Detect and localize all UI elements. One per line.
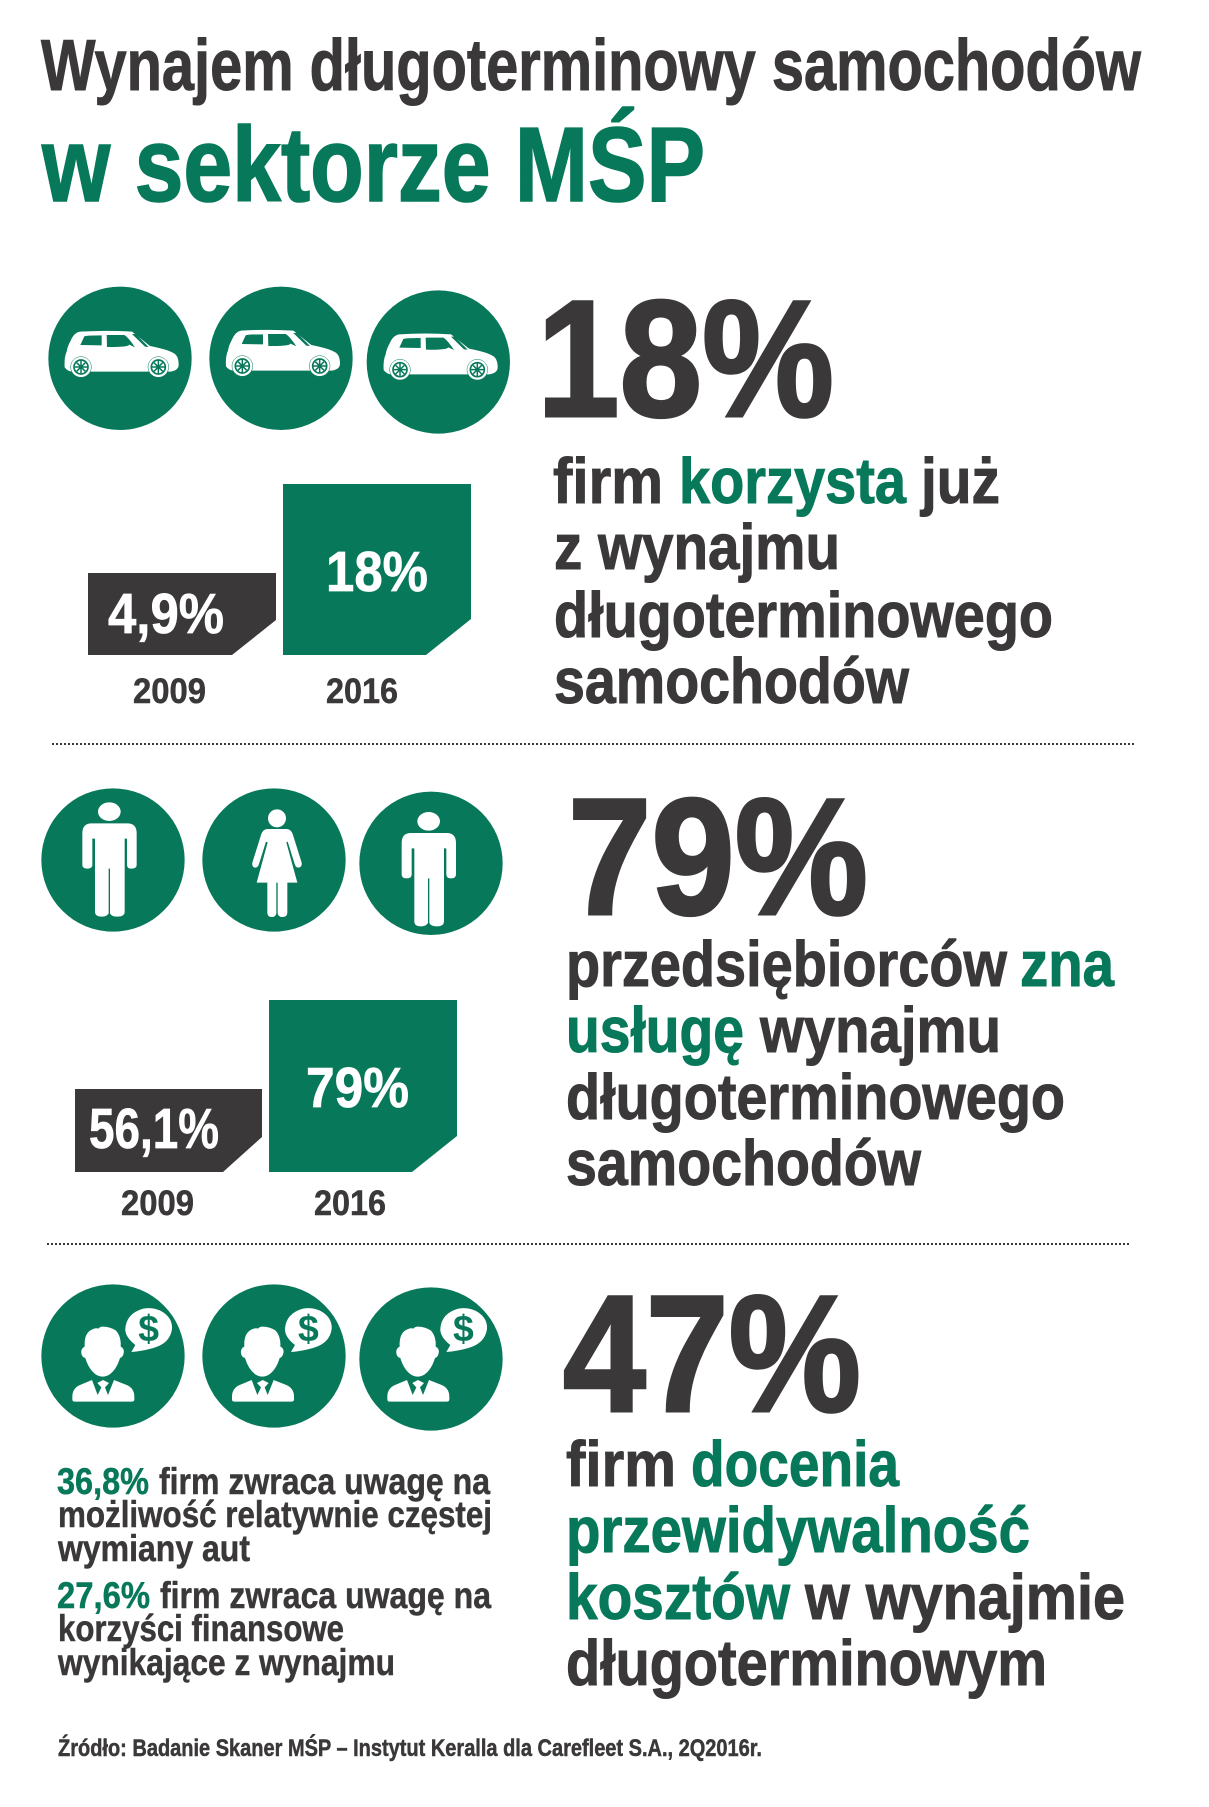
statement text: z wynajmu bbox=[554, 511, 840, 583]
bar chart 2009 vs 2016 bbox=[88, 484, 471, 711]
detail text: 36,8% bbox=[57, 1461, 492, 1569]
big number 18%: 18% bbox=[537, 267, 834, 452]
big number 47%: 47% bbox=[563, 1262, 861, 1447]
statement text: korzysta bbox=[679, 445, 906, 517]
value 18%: 18% bbox=[326, 540, 428, 604]
detail text: 27,6% bbox=[57, 1575, 491, 1683]
icon row: businessmen: $ bbox=[138, 1307, 159, 1349]
detail text: 27,6%: korzyści finansowe bbox=[58, 1608, 344, 1649]
detail text: 27,6%: firm zwraca uwagę na bbox=[160, 1575, 491, 1616]
statement text: samochodów bbox=[554, 645, 909, 717]
statement text: w wynajmie bbox=[804, 1561, 1125, 1633]
statement text: kosztów bbox=[566, 1561, 790, 1633]
icon row: businessmen: $ bbox=[453, 1307, 474, 1349]
icon row: businessmen bbox=[41, 1284, 503, 1431]
label 2009: 2009 bbox=[133, 672, 206, 711]
detail text: 27,6%: wynikające z wynajmu bbox=[57, 1642, 395, 1683]
detail text: 36,8%: możliwość relatywnie częstej bbox=[58, 1494, 492, 1535]
title bbox=[41, 26, 1142, 224]
bar 2016 bbox=[283, 484, 471, 655]
bar chart 2009 vs 2016 bbox=[75, 1000, 457, 1223]
value 79%: 79% bbox=[306, 1056, 409, 1120]
value 56,1%: 56,1% bbox=[89, 1097, 219, 1161]
statement text bbox=[553, 445, 1053, 717]
detail text: 27,6%: 27,6% bbox=[57, 1575, 150, 1616]
statement text: wynajmu bbox=[759, 994, 1001, 1066]
statement text: długoterminowego bbox=[554, 579, 1053, 651]
statement text: zna bbox=[1020, 928, 1114, 1000]
icon row: people bbox=[41, 788, 503, 935]
value 4,9%: 4,9% bbox=[108, 582, 224, 646]
label 2009: 2009 bbox=[121, 1184, 194, 1223]
label 2016: 2016 bbox=[314, 1184, 386, 1223]
statement text: firm bbox=[566, 1428, 676, 1500]
panel: car leasing usage bbox=[48, 267, 1053, 717]
statement text: docenia bbox=[691, 1428, 899, 1500]
statement text: przewidywalność bbox=[566, 1494, 1030, 1566]
panel: cost predictability bbox=[41, 1262, 1125, 1699]
statement text: usługę bbox=[566, 994, 744, 1066]
title line 2: w sektorze MŚP bbox=[41, 106, 705, 224]
statement text: już bbox=[920, 445, 1000, 517]
detail text: 36,8%: firm zwraca uwagę na bbox=[159, 1461, 490, 1502]
statement text: samochodów bbox=[566, 1127, 921, 1199]
bar 2009 bbox=[88, 573, 276, 655]
icon row: cars bbox=[48, 287, 510, 434]
statement text: długoterminowego bbox=[566, 1061, 1065, 1133]
statement text: firm bbox=[553, 445, 663, 517]
statement text: przedsiębiorców bbox=[566, 928, 1007, 1000]
statement text: długoterminowym bbox=[566, 1627, 1047, 1699]
icon row: businessmen: $ bbox=[298, 1307, 319, 1349]
statement text bbox=[566, 928, 1114, 1199]
label 2016: 2016 bbox=[326, 672, 398, 711]
big number 79%: 79% bbox=[568, 765, 868, 950]
statement text bbox=[566, 1428, 1125, 1699]
detail text: 36,8%: wymiany aut bbox=[57, 1528, 250, 1569]
source note: Źródło: Badanie Skaner MŚP – Instytut Keralla dla Carefleet S.A., 2Q2016r. bbox=[58, 1734, 762, 1762]
bar 2009 bbox=[75, 1089, 262, 1172]
panel: service awareness bbox=[41, 765, 1114, 1223]
bar 2016 bbox=[269, 1000, 457, 1172]
detail text: 36,8%: 36,8% bbox=[57, 1461, 149, 1502]
